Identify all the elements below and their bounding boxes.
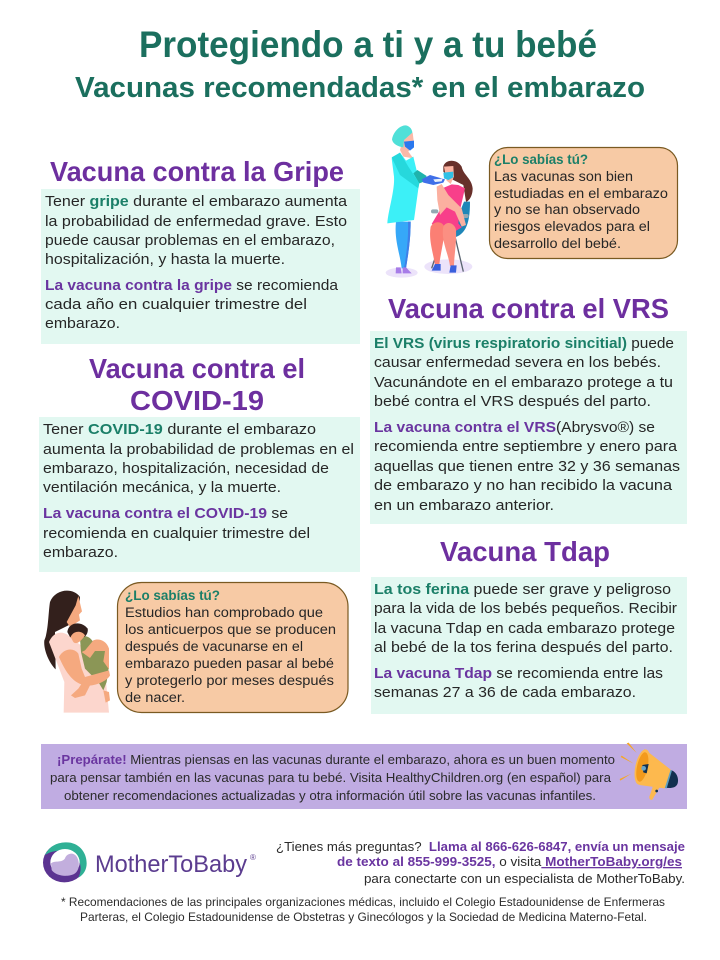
panel: Tdap: la vacuna Tdap en cada embarazo protege <box>374 620 675 637</box>
panel: Tdap: para la vida de los bebés pequeños. Recibir <box>374 600 677 617</box>
panel: COVID-19: ventilación mecánica, y la muerte. <box>43 479 281 496</box>
callout: vacunas estudiadas: y no se han observado <box>494 202 640 218</box>
icon: megaphone <box>620 743 678 800</box>
panel: COVID-19: Tener COVID-19 durante el embarazo <box>43 421 316 438</box>
callout: vacunas estudiadas <box>490 148 678 258</box>
callout: vacunas estudiadas: riesgos elevados para el <box>494 219 650 235</box>
callout: anticuerpos <box>118 582 348 712</box>
panel: COVID-19 <box>39 417 360 572</box>
panel: Tdap: La tos ferina puede ser grave y peligroso <box>374 581 671 598</box>
panel: Tdap: semanas 27 a 36 de cada embarazo. <box>374 684 636 701</box>
panel: VRS: en un embarazo anterior. <box>374 497 554 514</box>
title: Vacunas recomendadas* en el embarazo <box>75 72 645 104</box>
footnote: Parteras, el Colegio Estadounidense de Obstetras y Ginecólogos y la Sociedad de Medicina Materno-Fetal. <box>80 911 647 924</box>
callout: vacunas estudiadas: desarrollo del bebé. <box>494 236 621 252</box>
contact text: ¿Tienes más preguntas? Llama al 866-626-6847, envía un mensaje <box>276 839 685 854</box>
title <box>75 24 645 104</box>
contact text <box>276 839 685 886</box>
heading: VRS: Vacuna contra el VRS <box>388 293 669 324</box>
panel: COVID-19: aumenta la probabilidad de problemas en el <box>43 441 354 458</box>
panel: VRS: Vacunándote en el embarazo protege a tu <box>374 374 673 391</box>
panel: Gripe: embarazo. <box>45 315 120 332</box>
logo: MotherToBaby <box>43 842 256 882</box>
panel: COVID-19: recomienda en cualquier trimestre del <box>43 525 310 542</box>
callout: vacunas estudiadas: Las vacunas son bien <box>494 169 633 185</box>
panel: COVID-19: embarazo. <box>43 544 118 561</box>
footnote: * Recomendaciones de las principales organizaciones médicas, incluido el Colegio Estadounidense de Enfermeras <box>61 896 665 909</box>
heading: COVID-19: COVID-19 <box>130 385 264 416</box>
panel: Tdap <box>371 577 687 714</box>
panel: VRS: causar enfermedad severa en los bebés. <box>374 354 661 371</box>
panel: Gripe: La vacuna contra la gripe se recomienda <box>45 277 339 294</box>
panel: Tdap: al bebé de la tos ferina después del parto. <box>374 639 673 656</box>
callout: anticuerpos: y protegerlo por meses después <box>125 673 334 689</box>
panel: Gripe: puede causar problemas en el embarazo, <box>45 232 335 249</box>
panel: VRS: recomienda entre septiembre y enero para <box>374 438 678 455</box>
callout: anticuerpos: de nacer. <box>125 690 185 706</box>
banner: Prepárate: obtener recomendaciones actualizadas y otra información útil sobre las vacunas infantiles. <box>64 789 596 803</box>
callout: vacunas estudiadas: estudiadas en el embarazo <box>494 186 668 202</box>
heading: COVID-19 <box>89 353 305 416</box>
callout: anticuerpos: Estudios han comprobado que <box>125 605 323 621</box>
banner: Prepárate <box>41 744 687 809</box>
panel: VRS <box>370 331 687 524</box>
footnote <box>61 896 665 924</box>
panel: Tdap: La vacuna Tdap se recomienda entre las <box>374 665 663 682</box>
panel: Gripe: Tener gripe durante el embarazo aumenta <box>45 193 348 210</box>
panel: VRS: La vacuna contra el VRS (Abrysvo®) se <box>374 419 655 436</box>
banner: Prepárate: para pensar también en las vacunas para tu bebé. Visita HealthyChildren.org (en español) para <box>50 771 611 785</box>
heading: Tdap: Vacuna Tdap <box>440 536 610 567</box>
panel: VRS: aquellas que tienen entre 32 y 36 semanas <box>374 458 680 475</box>
contact text: de texto al 855-999-3525, o visita MotherToBaby.org/es <box>337 854 682 869</box>
panel: Gripe <box>41 189 360 344</box>
panel: Gripe: hospitalización, y hasta la muerte. <box>45 251 285 268</box>
panel: VRS: de embarazo y no han recibido la vacuna <box>374 477 673 494</box>
icon: mother holding baby <box>44 591 110 713</box>
callout: anticuerpos: embarazo pueden pasar al bebé <box>125 656 334 672</box>
title: Protegiendo a ti y a tu bebé <box>139 24 597 65</box>
callout: vacunas estudiadas: ¿Lo sabías tú? <box>494 152 588 168</box>
heading: Gripe: Vacuna contra la Gripe <box>50 156 344 187</box>
logo: MotherToBaby: ® <box>250 853 256 862</box>
icon: nurse vaccinating woman <box>386 125 473 278</box>
callout: anticuerpos: ¿Lo sabías tú? <box>125 588 220 604</box>
callout: anticuerpos: después de vacunarse en el <box>125 639 303 655</box>
panel: VRS: bebé contra el VRS después del parto. <box>374 393 651 410</box>
panel: COVID-19: embarazo, hospitalización, necesidad de <box>43 460 329 477</box>
callout: anticuerpos: los anticuerpos que se producen <box>125 622 336 638</box>
logo: MotherToBaby: MotherToBaby <box>95 851 247 878</box>
contact text: para conectarte con un especialista de MotherToBaby. <box>364 871 685 886</box>
heading: COVID-19: Vacuna contra el <box>89 353 305 384</box>
banner: Prepárate: ¡Prepárate! Mientras piensas en las vacunas durante el embarazo, ahora es un buen momento <box>57 753 615 767</box>
panel: Gripe: cada año en cualquier trimestre del <box>45 296 307 313</box>
panel: VRS: El VRS (virus respiratorio sincitial) puede <box>374 335 674 352</box>
panel: COVID-19: La vacuna contra el COVID-19 se <box>43 505 288 522</box>
panel: Gripe: la probabilidad de enfermedad grave. Esto <box>45 213 347 230</box>
